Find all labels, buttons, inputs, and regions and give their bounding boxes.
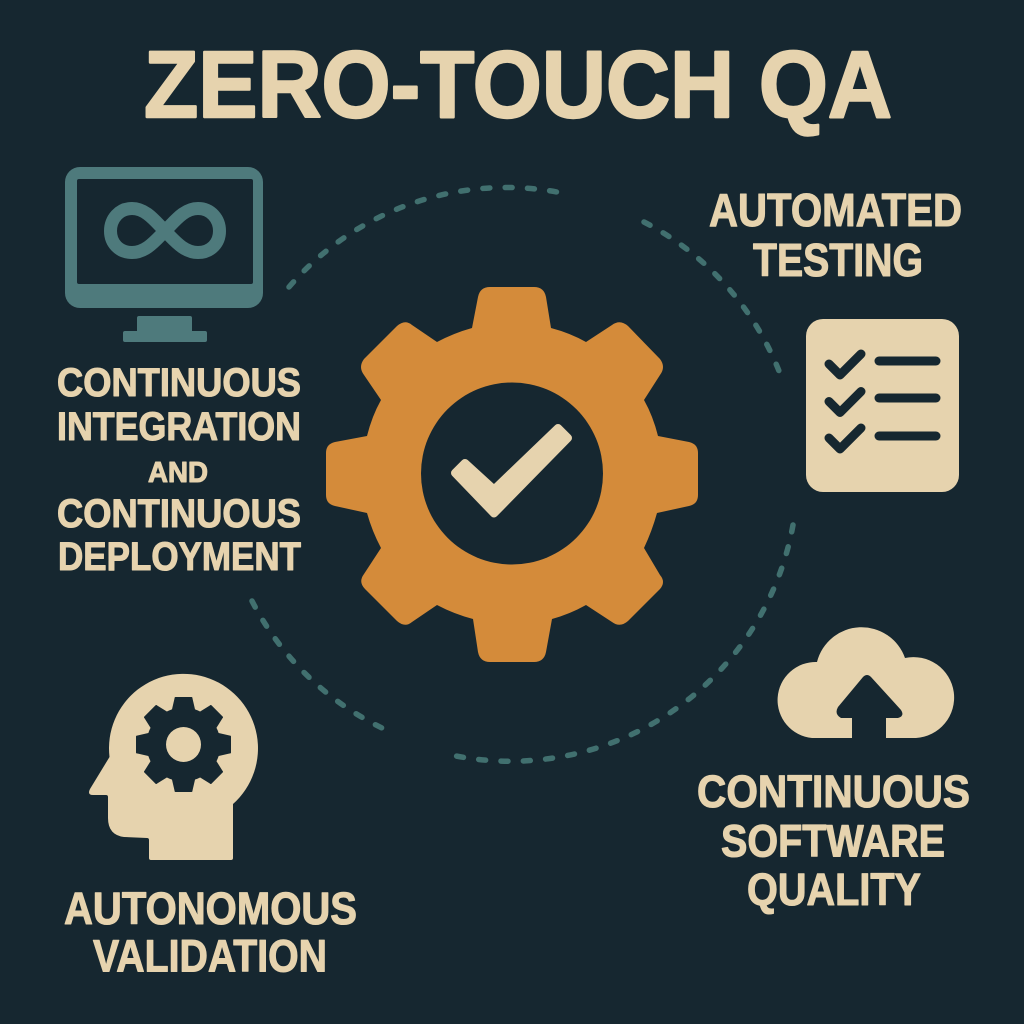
label: continuous integration and continuous deployment: AND: [148, 457, 208, 489]
title: ZERO-TOUCH QA: [144, 32, 892, 138]
checklist marks and lines: [829, 354, 936, 449]
monitor screen: [77, 179, 253, 284]
gear body: [326, 287, 698, 662]
label: automated testing: TESTING: [753, 234, 923, 286]
label: continuous integration and continuous deployment: CONTINUOUS: [57, 361, 301, 405]
central gear with checkmark: [326, 287, 698, 662]
label: continuous integration and continuous deployment: DEPLOYMENT: [58, 535, 301, 579]
label: continuous software quality: QUALITY: [747, 864, 921, 915]
label: continuous software quality: SOFTWARE: [721, 816, 945, 866]
label: autonomous validation: AUTONOMOUS: [64, 883, 357, 934]
label: automated testing: AUTOMATED: [709, 184, 962, 236]
head silhouette: [89, 674, 258, 860]
dashed orbit ring: [252, 187, 793, 761]
infinity symbol: [110, 208, 220, 252]
label: automated testing: [709, 184, 962, 286]
icon: head with gear: [89, 674, 258, 860]
label: continuous software quality: [697, 766, 970, 915]
label: continuous software quality: CONTINUOUS: [697, 766, 970, 817]
gear hole: [421, 382, 603, 564]
checkmark: [455, 428, 568, 514]
head gear: [136, 697, 231, 792]
label: continuous integration and continuous deployment: [57, 361, 301, 579]
icon: cloud upload: [778, 627, 954, 738]
checklist card: [806, 319, 959, 492]
monitor stand: [123, 316, 207, 342]
label: autonomous validation: [64, 883, 357, 982]
label: autonomous validation: VALIDATION: [93, 930, 327, 982]
monitor frame: [65, 167, 263, 308]
icon: monitor with infinity loop: [65, 167, 263, 342]
label: continuous integration and continuous deployment: INTEGRATION: [57, 405, 301, 449]
label: continuous integration and continuous deployment: CONTINUOUS: [57, 492, 301, 536]
icon: checklist: [806, 319, 959, 492]
